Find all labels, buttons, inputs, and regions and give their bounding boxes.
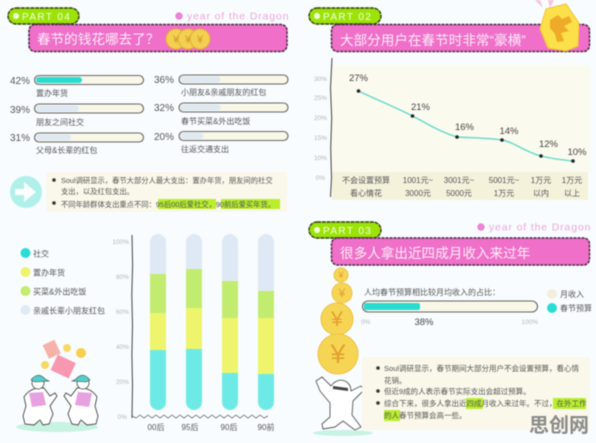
callout: survey conclusions: 但近9成的人表示春节实际支出会超过预算。 <box>384 386 531 396</box>
progress bar: 朋友之间社交 39%: 39% <box>10 105 30 116</box>
category labels: 以内 <box>533 188 549 198</box>
callout: survey conclusions: 的人春节预算会高一些。 <box>384 410 466 420</box>
progress bar: 往返交通支出 20% <box>154 132 288 154</box>
icon: arrow in circle <box>10 176 42 208</box>
value labels: 21% <box>411 102 431 113</box>
panel: where the money went <box>8 8 289 432</box>
value labels: 27% <box>349 73 369 84</box>
value labels: 12% <box>539 139 559 150</box>
progress bar: 置办年货 42%: 42% <box>10 76 30 87</box>
category labels <box>342 175 582 198</box>
callout: survey conclusions: 综合下来，很多人拿出近四成月收入来过年。不过，在外工作 <box>384 398 587 408</box>
bar: 90后 <box>221 234 238 432</box>
icon: stack of gold coins: ¥ <box>329 339 346 369</box>
value labels: 16% <box>455 122 475 133</box>
illustration: two squatting people with red envelopes <box>16 340 98 432</box>
callout: survey summary: 支出，以及红包支出。 <box>61 187 134 196</box>
icon: golden dragon <box>535 0 579 51</box>
y axis labels: 25% <box>314 95 327 102</box>
callout: survey conclusions: 花销。 <box>384 375 406 385</box>
progress bar: 春节买菜&外出吃饭 32% <box>154 103 288 126</box>
data points <box>357 89 575 163</box>
callout: survey conclusions: Soul调研显示，春节期间大部分用户不会设置预算，看心情 <box>384 363 580 373</box>
badge: PART 03 <box>309 222 381 238</box>
bar: 90前 <box>258 234 274 432</box>
icon: stack of gold coins: ¥ <box>338 286 346 300</box>
progress: budget vs income 38% <box>361 287 538 328</box>
progress bar: 置办年货 42% <box>10 76 144 98</box>
bar: 00后: 00后 <box>148 422 164 432</box>
bar: 90前: 90前 <box>258 422 274 432</box>
category labels: 5000元 <box>446 189 472 198</box>
category labels: 不会设置预算 <box>342 175 390 185</box>
bar: 95后 <box>182 234 202 432</box>
progress bar: 小朋友&亲戚朋友的红包 36%: 小朋友&亲戚朋友的红包 <box>181 87 266 97</box>
category labels: 以上 <box>564 189 580 198</box>
progress bar: 置办年货 42%: 置办年货 <box>36 88 68 98</box>
progress: budget vs income 38%: 人均春节预算相比较月均收入的占比： <box>364 287 500 297</box>
category labels: 看心情花 <box>350 188 382 198</box>
category labels: 3001元~ <box>444 176 475 185</box>
callout: survey summary: Soul调研显示，春节大部分人最大支出：置办年货，朋友间的社交 <box>61 176 273 185</box>
value labels: 14% <box>499 126 519 137</box>
icon: stack of gold coins <box>318 268 358 374</box>
progress bar: 父母&长辈的红包 31% <box>10 133 144 155</box>
y axis labels: 0% <box>316 175 325 182</box>
icon: three gold coins: ¥ <box>172 34 180 46</box>
bar: 95后: 95后 <box>182 422 198 432</box>
progress bar: 父母&长辈的红包 31%: 31% <box>10 133 30 144</box>
y axis labels <box>314 76 327 182</box>
progress bar: 往返交通支出 20%: 往返交通支出 <box>181 144 229 154</box>
bar: 00后 <box>148 234 166 432</box>
icon: stack of gold coins: ¥ <box>337 270 344 280</box>
progress bar: 小朋友&亲戚朋友的红包 36%: 36% <box>154 75 174 86</box>
badge: PART 03: PART 03 <box>323 226 372 237</box>
progress bar: 父母&长辈的红包 31%: 父母&长辈的红包 <box>36 145 97 155</box>
legend: income and budget: 春节预算 <box>560 303 592 313</box>
icon: three gold coins: ¥ <box>184 34 192 46</box>
category labels: 1万元 <box>531 176 551 185</box>
callout: survey summary <box>46 172 287 212</box>
callout: survey summary: 不同年龄群体支出重点不同：95后00后爱社交，90前后爱买年货。 <box>61 200 275 209</box>
watermark: 思创网 <box>529 414 589 437</box>
y axis labels: 0% <box>118 414 127 421</box>
y axis labels: 30% <box>314 76 327 83</box>
badge: PART 02: PART 02 <box>323 12 372 23</box>
legend: spending categories: 社交 <box>33 248 49 258</box>
heading bar <box>29 24 287 52</box>
y axis labels: 10% <box>314 155 327 162</box>
progress bar: 朋友之间社交 39%: 朋友之间社交 <box>36 117 84 127</box>
y axis labels: 15% <box>314 135 327 142</box>
value labels <box>349 73 587 158</box>
tag: year of the Dragon: year of the Dragon <box>187 10 289 22</box>
y axis labels: 20% <box>116 379 129 386</box>
y axis labels: 80% <box>116 274 129 281</box>
progress: budget vs income 38%: 100% <box>521 319 538 326</box>
legend: income and budget <box>547 289 592 313</box>
progress bar: 春节买菜&外出吃饭 32%: 春节买菜&外出吃饭 <box>181 116 250 126</box>
icon: stack of gold coins: ¥ <box>330 308 343 331</box>
icon: three gold coins <box>166 29 210 49</box>
badge: PART 04 <box>8 8 79 24</box>
category labels: 1001元~ <box>403 176 434 185</box>
heading bar: 很多人拿出近四成月收入来过年 <box>340 245 530 261</box>
badge: PART 02 <box>309 8 381 24</box>
value labels: 10% <box>567 147 587 158</box>
legend: spending categories: 买菜&外出吃饭 <box>33 286 86 296</box>
progress bar: 朋友之间社交 39% <box>10 104 144 127</box>
icon: three gold coins: ¥ <box>196 34 204 46</box>
legend: income and budget: 月收入 <box>560 289 584 299</box>
trend line <box>358 91 573 161</box>
y axis labels: 40% <box>116 344 129 351</box>
callout: survey conclusions <box>362 357 590 430</box>
progress: budget vs income 38%: 0% <box>361 319 371 326</box>
legend: spending categories: 亲戚长辈小朋友红包 <box>33 306 105 316</box>
progress bar: 春节买菜&外出吃饭 32%: 32% <box>154 103 174 114</box>
stacked bar chart by age group <box>112 234 274 432</box>
heading bar: 春节的钱花哪去了？ <box>37 32 159 47</box>
y axis labels: 100% <box>112 239 129 246</box>
category labels: 3000元 <box>405 189 431 198</box>
heading bar <box>332 24 590 52</box>
line chart <box>314 58 590 200</box>
category labels: 1万元 <box>494 189 514 198</box>
panel: share of monthly income <box>309 222 592 436</box>
badge: PART 04: PART 04 <box>22 12 71 23</box>
legend: spending categories <box>20 248 105 316</box>
tag: year of the Dragon: year of the Dragon <box>489 222 591 234</box>
legend: spending categories: 置办年货 <box>33 268 65 278</box>
y axis labels: 60% <box>116 309 129 316</box>
category labels: 5001元~ <box>489 176 520 185</box>
progress: budget vs income 38%: 38% <box>414 317 434 328</box>
illustration: running person <box>313 377 373 436</box>
y axis labels <box>112 239 129 421</box>
bar: 90后: 90后 <box>221 422 237 432</box>
heading bar <box>332 238 590 265</box>
progress bar: 往返交通支出 20%: 20% <box>154 132 174 143</box>
progress bar: 小朋友&亲戚朋友的红包 36% <box>154 75 288 97</box>
category labels: 1万元 <box>562 176 582 185</box>
panel: budget line chart <box>309 0 590 200</box>
heading bar: 大部分用户在春节时非常“豪横” <box>340 32 526 48</box>
y axis labels: 20% <box>314 115 327 122</box>
